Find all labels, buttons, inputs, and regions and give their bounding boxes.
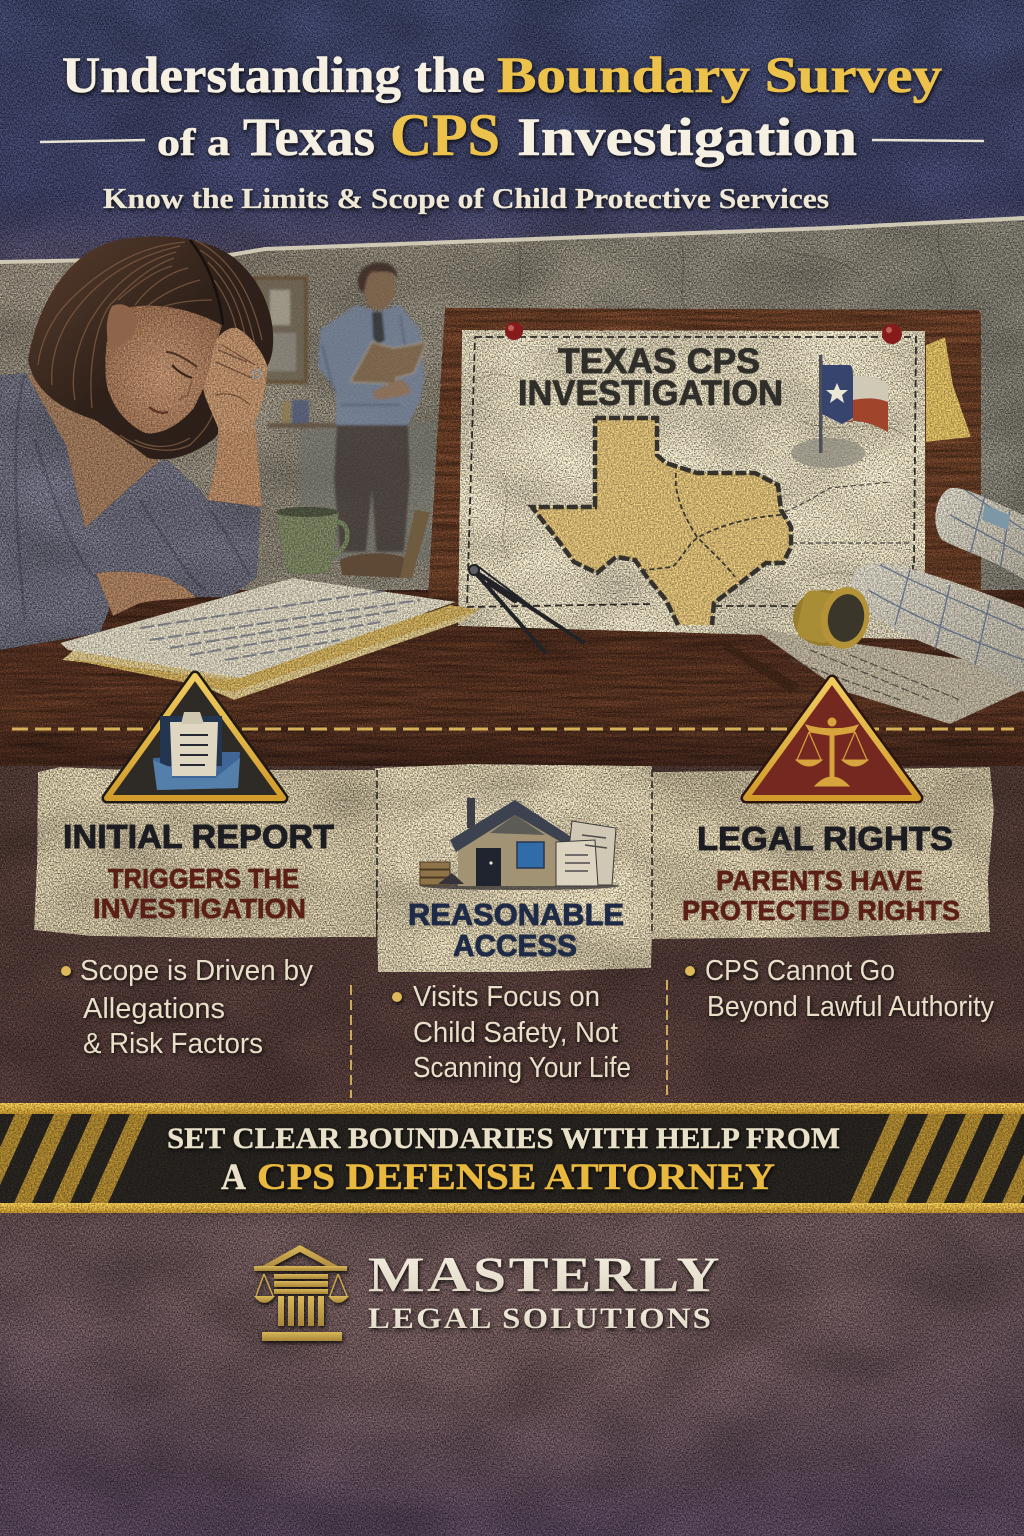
bullets: visits: Visits Focus on	[413, 981, 600, 1013]
banner text line two: CPS DEFENSE ATTORNEY	[257, 1157, 775, 1198]
man shirt	[318, 305, 424, 425]
icon: house with documents	[420, 798, 620, 890]
bullets: scope: Allegations	[83, 993, 225, 1025]
map board	[428, 308, 981, 640]
icon: warning triangle with scales of justice	[746, 680, 918, 798]
wall shelf	[268, 400, 338, 428]
subheading: parents have protected rights	[682, 865, 960, 926]
wordmark: MASTERLY	[368, 1246, 722, 1302]
heading: initial report: INITIAL REPORT	[63, 818, 334, 855]
bullet columns	[61, 955, 994, 1098]
paper card center	[375, 764, 653, 972]
bullets: authority: CPS Cannot Go	[705, 955, 895, 987]
title line two: Investigation	[517, 107, 857, 167]
background man reading a file	[254, 262, 435, 560]
title line one: Understanding the	[62, 48, 485, 104]
title line one: Boundary Survey	[497, 48, 942, 104]
icon: warning triangle with clipboard and folder	[107, 676, 283, 798]
ear	[107, 304, 136, 352]
banner text line one: SET CLEAR BOUNDARIES WITH HELP FROM	[167, 1122, 840, 1155]
face	[105, 306, 222, 433]
map paper	[458, 330, 930, 640]
man head	[364, 269, 396, 310]
green coffee mug	[276, 507, 347, 574]
banner base	[0, 1103, 1024, 1213]
open book	[350, 342, 427, 384]
case file stack	[60, 578, 480, 700]
subtitle: Know the Limits & Scope of Child Protective Services	[103, 183, 829, 215]
title line two: CPS	[390, 102, 500, 168]
title block	[40, 48, 984, 215]
bullets: scope: Scope is Driven by	[80, 955, 313, 987]
map title: INVESTIGATION	[518, 374, 783, 413]
woman with hand on forehead	[0, 236, 273, 650]
logo: Masterly Legal Solutions	[253, 1245, 722, 1341]
sweater	[0, 373, 260, 650]
Texas state shape	[532, 418, 912, 625]
survey boundary dashed line	[12, 728, 1014, 730]
illustration: desk scene	[0, 218, 1024, 766]
brass tape measure	[793, 583, 874, 653]
card: initial report	[34, 767, 376, 938]
survey documents under tape	[722, 628, 1024, 724]
dashed map border	[467, 337, 916, 607]
card: legal rights	[652, 767, 994, 939]
title flourishes	[40, 140, 984, 142]
bullets: scope	[61, 955, 313, 1060]
rolled blueprints	[852, 488, 1024, 692]
desk surface	[0, 590, 1024, 766]
facial features	[149, 352, 197, 413]
dashed card separators	[377, 770, 652, 935]
leaning chair back	[340, 510, 430, 578]
resting arm	[96, 572, 196, 616]
icon: courthouse with scales	[253, 1245, 349, 1341]
sticky note	[926, 337, 971, 442]
bullets: authority	[685, 955, 994, 1023]
bullets: scope: & Risk Factors	[83, 1028, 263, 1060]
subheading: triggers the investigation: TRIGGERS THE	[108, 863, 299, 894]
heading: reasonable access	[408, 897, 624, 963]
hand on forehead	[203, 328, 267, 434]
bullets: authority: Beyond Lawful Authority	[707, 991, 994, 1023]
title line two: Texas	[243, 107, 375, 167]
man trousers	[334, 420, 410, 552]
heading: reasonable access: REASONABLE	[408, 897, 624, 932]
card: reasonable access	[375, 764, 653, 972]
subheading: triggers the investigation	[93, 863, 306, 924]
title line two	[157, 102, 857, 168]
title line two: of a	[157, 122, 230, 164]
bullets: visits: Child Safety, Not	[413, 1017, 618, 1049]
hair strands	[38, 240, 262, 450]
wood frame	[428, 308, 981, 610]
paper card right	[652, 767, 994, 939]
drafting compass	[469, 565, 583, 652]
back hair	[28, 236, 273, 459]
map title	[518, 342, 783, 413]
torn paper edge	[0, 218, 1024, 262]
bullets: visits	[392, 981, 631, 1084]
title line one	[62, 48, 942, 104]
red push pins	[505, 322, 902, 344]
subheading: parents have protected rights: PROTECTED RIGHTS	[682, 895, 960, 926]
panel: three info cards	[34, 764, 994, 972]
dashed column separators	[351, 980, 667, 1098]
map title: TEXAS CPS	[558, 342, 760, 381]
neck and chest	[26, 373, 158, 528]
panel: wall backdrop	[0, 218, 1024, 660]
wordmark	[368, 1246, 722, 1335]
Texas flag	[791, 355, 888, 468]
bullets: visits: Scanning Your Life	[413, 1052, 631, 1084]
wall frame	[254, 278, 306, 382]
subheading: parents have protected rights: PARENTS HAVE	[716, 865, 923, 896]
subheading: triggers the investigation: INVESTIGATION	[93, 893, 306, 924]
paper card left	[34, 767, 376, 938]
banner text line two: A	[221, 1157, 246, 1198]
heading: legal rights: LEGAL RIGHTS	[697, 820, 953, 857]
forearm	[207, 428, 262, 507]
wordmark: LEGAL SOLUTIONS	[368, 1302, 713, 1335]
heading: reasonable access: ACCESS	[453, 928, 577, 963]
callout banner: caution tape	[0, 1103, 1024, 1213]
figure haze	[300, 420, 435, 560]
